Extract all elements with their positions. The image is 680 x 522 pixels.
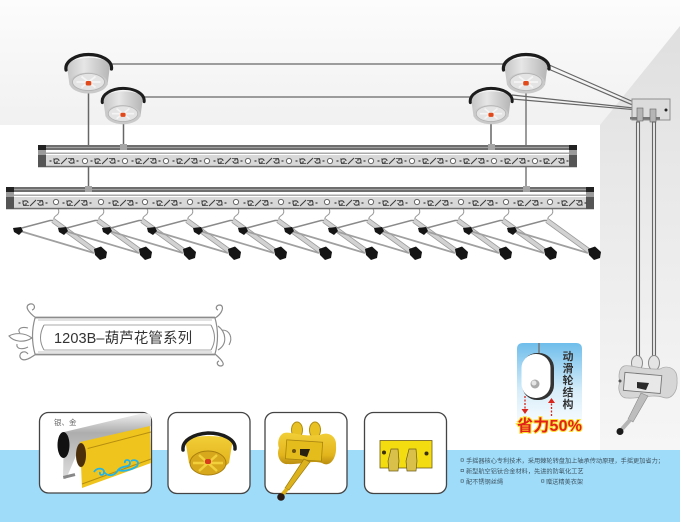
vertical label: 动 (562, 350, 574, 363)
feature list: 新型航空铝钛合金材料，先进的防氧化工艺 (466, 468, 584, 476)
vertical label: 结 (562, 385, 574, 399)
vertical label: 构 (562, 397, 574, 411)
vertical label: 滑 (562, 361, 574, 375)
colour label: 银、金 (54, 417, 77, 427)
hangers row (13, 205, 601, 260)
icon: gold pulley (183, 433, 235, 475)
panel: gold pulley (168, 412, 250, 494)
title frame (9, 304, 231, 366)
feature list (461, 457, 664, 486)
silver tube (58, 413, 151, 479)
drying rack cables (88, 64, 652, 187)
vertical label: 轮 (562, 373, 574, 387)
ceiling pulley rear left (66, 54, 112, 94)
gold tube (76, 426, 151, 488)
feature list: 赠送精美衣架 (546, 478, 583, 486)
panel: aluminium tube colours (40, 412, 152, 493)
ceiling pulley rear right (503, 54, 549, 94)
feature list: 配不锈钢丝绳 (466, 478, 503, 486)
icon: moving pulley (522, 343, 554, 400)
vertical rods to hand crank (636, 122, 656, 360)
ceiling pulley front right (470, 88, 512, 124)
lower drying bar (6, 186, 594, 209)
arrow: pull down (522, 396, 528, 414)
arrow: pull up (548, 398, 555, 416)
feature list: 手摇器核心专利技术，采用棘轮转盘加上轴承传动原理，手摇更加省力； (466, 457, 664, 465)
panel: gold hand crank (265, 412, 347, 501)
callout: moving pulley saves 50% (517, 343, 582, 435)
vertical label (562, 350, 574, 411)
icon: silver hand crank (616, 356, 677, 435)
title text: 1203B–葫芦花管系列 (54, 330, 192, 347)
icon: gold bracket (380, 440, 432, 471)
icon: gold crank (277, 422, 336, 501)
ceiling pulley front left (102, 88, 144, 124)
upper drying bar (38, 144, 577, 167)
wall bracket (630, 99, 670, 122)
panel: gold wall bracket (364, 412, 446, 494)
saving label: 省力50% (517, 417, 582, 435)
